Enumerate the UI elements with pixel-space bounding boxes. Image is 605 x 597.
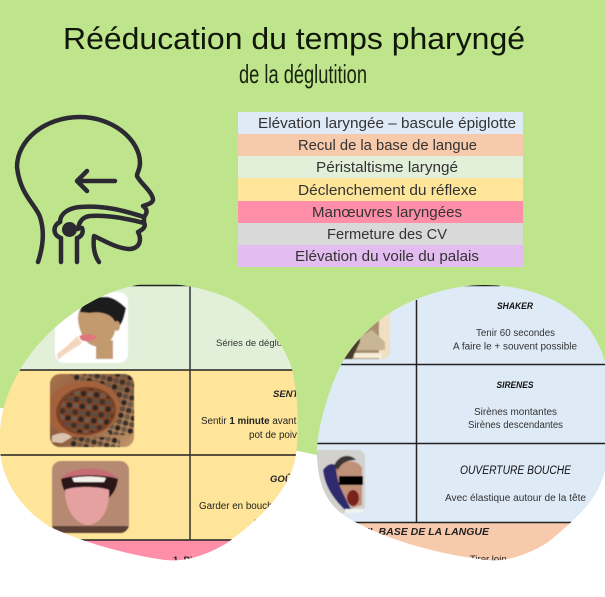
panel: left exercise table in blob — [0, 284, 298, 560]
legend row: vocal cords — [238, 223, 523, 245]
legend: pharyngeal phase colour key — [238, 112, 523, 267]
text: shaker exercise: A faire le + souvent possible — [453, 342, 577, 352]
text: taste exercise: GOÛT — [270, 473, 299, 485]
image: patient with elastic band and open mouth — [317, 450, 366, 514]
image: shaker exercise photo — [344, 313, 390, 360]
green background — [0, 0, 605, 470]
text: tongue base section — [368, 528, 506, 560]
legend row: tongue base — [238, 134, 523, 156]
text: shaker exercise — [453, 301, 577, 352]
text: sirens exercise — [468, 380, 563, 431]
text: sirens exercise: SIRENES — [496, 380, 534, 391]
legend row: laryngeal elevation — [238, 112, 523, 134]
text: taste exercise — [200, 474, 290, 520]
text: smell exercise — [202, 390, 298, 440]
text: smell exercise: SENTIR — [273, 389, 308, 400]
legend row: manoeuvres: Manœuvres laryngées — [312, 205, 462, 221]
legend row: manoeuvres — [238, 201, 523, 223]
icon: head profile with pharynx and arrow — [17, 117, 153, 262]
text: tongue base section: Tirer loin — [470, 554, 507, 565]
image: patient touching tongue — [55, 292, 128, 363]
text: smell exercise: pot de poivre — [249, 430, 306, 441]
legend row: soft palate: Elévation du voile du palais — [295, 249, 479, 265]
text: taste exercise: - — [254, 515, 257, 526]
panel: right exercise table in blob — [310, 285, 605, 568]
text: peristalsis exercise: Séries de déglutitions — [216, 338, 307, 349]
text: shaker exercise: SHAKER — [497, 301, 533, 312]
text: sirens exercise: Sirènes descendantes — [468, 420, 563, 431]
legend row: tongue base: Recul de la base de langue — [298, 138, 477, 154]
text: shaker exercise: Tenir 60 secondes — [476, 328, 555, 339]
legend row: soft palate — [238, 245, 523, 267]
text: sirens exercise: Sirènes montantes — [474, 407, 557, 418]
text: taste exercise: Garder en bouche — [199, 501, 279, 512]
legend row: vocal cords: Fermeture des CV — [327, 227, 447, 243]
image: peppercorns in wooden bowl — [42, 374, 134, 447]
text: smell exercise: Sentir 1 minute avant le repas — [201, 416, 334, 427]
legend row: laryngeal elevation: Elévation laryngée – bascule épiglotte — [258, 116, 516, 132]
text: mouth opening exercise: Avec élastique autour de la tête — [445, 493, 586, 504]
legend row: reflex — [238, 178, 523, 201]
text: mouth opening exercise — [445, 465, 586, 504]
text: laryngeal manoeuvres: 1. Pi — [173, 555, 193, 566]
legend row: peristalsis — [238, 156, 523, 178]
text: mouth opening exercise: OUVERTURE BOUCHE — [460, 465, 571, 477]
image: open mouth with tongue — [52, 461, 129, 533]
text: tongue base section: RECUL BASE DE LA LANGUE — [340, 526, 490, 538]
title: Rééducation du temps pharyngé — [63, 21, 525, 56]
legend row: peristalsis: Péristaltisme laryngé — [316, 160, 458, 176]
legend row: reflex: Déclenchement du réflexe — [298, 183, 477, 199]
subtitle: de la déglutition — [239, 59, 367, 89]
